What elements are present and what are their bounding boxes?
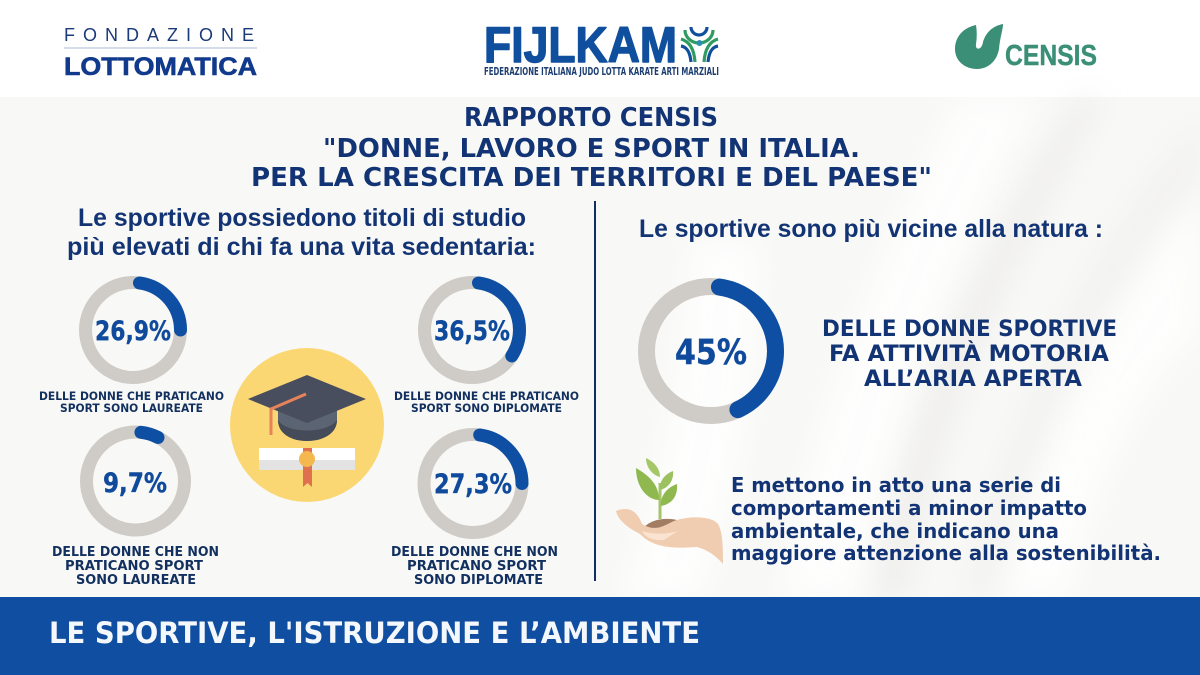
donut: 26,9% laureate: 26,9%: [95, 316, 171, 347]
fabric background: [0, 97, 1200, 600]
donut: 36,5% diplomate: [424, 282, 520, 378]
logo: Fondazione Lottomatica: FONDAZIONE: [64, 25, 254, 45]
text: sustainability: E mettono in atto una serie di: [731, 473, 1061, 497]
footer band: [0, 597, 1200, 675]
icon: Censis mark: [955, 24, 1003, 69]
donut: 27,3% diplomate: 27,3%: [434, 469, 512, 500]
caption: 9,7%: SONO LAUREATE: [76, 573, 196, 588]
donut: 45%: 45%: [675, 333, 747, 373]
logo: FIJLKAM: FEDERAZIONE ITALIANA JUDO LOTTA KARATE ARTI MARZIALI: [484, 66, 719, 78]
caption: 36,5%: [394, 389, 579, 415]
text: 45% description: DELLE DONNE SPORTIVE: [822, 317, 1117, 342]
logo: Censis: [955, 24, 1097, 72]
text: 45% description: FA ATTIVITÀ MOTORIA: [829, 341, 1109, 367]
caption: 26,9%: [39, 389, 224, 415]
heading: education: più elevati di chi fa una vita sedentaria:: [67, 233, 536, 261]
icon: graduation cap and diploma: [230, 348, 384, 502]
caption: 27,3%: SONO DIPLOMATE: [414, 573, 543, 588]
caption: 9,7%: PRATICANO SPORT: [65, 559, 203, 574]
title: [251, 103, 932, 193]
caption: 26,9%: SPORT SONO LAUREATE: [60, 401, 203, 415]
caption: 9,7%: DELLE DONNE CHE NON: [52, 545, 219, 560]
vertical divider: [594, 201, 596, 581]
donut: 9,7% laureate: [86, 432, 184, 530]
caption: 27,3%: [391, 545, 558, 588]
donut: 45%: [646, 286, 776, 416]
caption: 27,3%: PRATICANO SPORT: [407, 559, 546, 574]
caption: 9,7%: [52, 545, 219, 588]
logo: Fondazione Lottomatica: [64, 25, 257, 81]
donut: 27,3% diplomate: [424, 434, 522, 532]
text: 45% description: [822, 317, 1117, 392]
caption: 26,9%: DELLE DONNE CHE PRATICANO: [39, 389, 224, 403]
donut: 26,9% laureate: [86, 282, 180, 378]
text: sustainability: comportamenti a minor impatto: [731, 496, 1087, 520]
heading: education: Le sportive possiedono titoli di studio: [78, 204, 526, 232]
text: 45% description: ALL’ARIA APERTA: [864, 367, 1082, 392]
footer band: LE SPORTIVE, L'ISTRUZIONE E L’AMBIENTE: [49, 616, 700, 650]
logo: Censis: CENSIS: [1005, 40, 1097, 72]
donut: 9,7% laureate: 9,7%: [103, 468, 167, 499]
text: sustainability: ambientale, che indicano una: [731, 519, 1059, 543]
title: "DONNE, LAVORO E SPORT IN ITALIA.: [323, 134, 860, 164]
text: sustainability: [731, 473, 1161, 565]
title: PER LA CRESCITA DEI TERRITORI E DEL PAESE": [251, 163, 932, 193]
heading: education: [67, 204, 536, 261]
text: sustainability: maggiore attenzione alla sostenibilità.: [731, 541, 1161, 565]
icon: hand holding plant: [616, 458, 723, 564]
logo: Fondazione Lottomatica: LOTTOMATICA: [64, 53, 257, 81]
donut: 36,5% diplomate: 36,5%: [434, 316, 510, 347]
header background: [0, 0, 1200, 97]
caption: 27,3%: DELLE DONNE CHE NON: [391, 545, 558, 560]
caption: 36,5%: DELLE DONNE CHE PRATICANO: [394, 389, 579, 403]
caption: 36,5%: SPORT SONO DIPLOMATE: [411, 401, 562, 415]
heading: nature: Le sportive sono più vicine alla natura :: [639, 215, 1103, 243]
icon: FIJLKAM emblem: [681, 27, 718, 62]
logo: FIJLKAM: FIJLKAM: [484, 17, 677, 73]
title: RAPPORTO CENSIS: [464, 103, 718, 133]
